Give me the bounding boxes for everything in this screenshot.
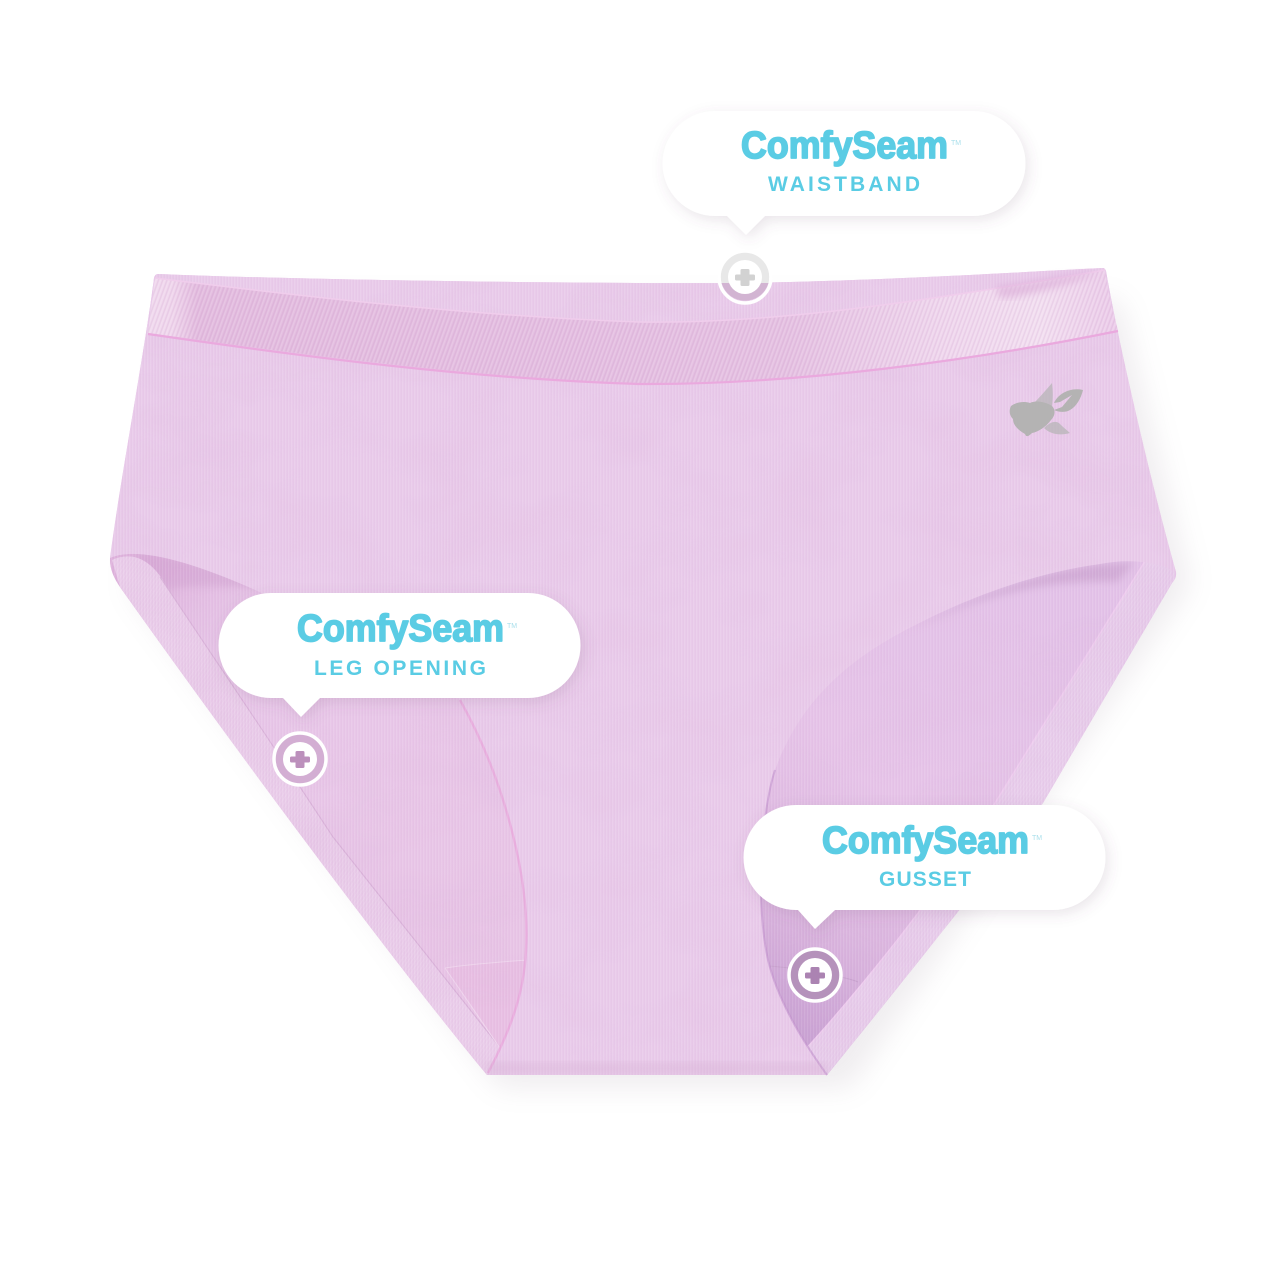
- waistband lower edge: [148, 331, 1118, 384]
- marker: waistband: [719, 251, 771, 303]
- knit texture: [762, 905, 808, 1046]
- front panel left-edge pink seam: [460, 700, 526, 1073]
- garment: briefs: [100, 260, 1185, 1080]
- front panel: [110, 268, 1176, 1075]
- silhouette base: [110, 268, 1176, 1075]
- callout: gusset: [744, 805, 1106, 929]
- trademark: TM: [507, 623, 517, 630]
- right gusset seam: [768, 966, 858, 982]
- callout: leg opening: [218, 593, 580, 717]
- waistband: [148, 270, 1118, 383]
- fish body: [1010, 402, 1055, 436]
- brand name: ComfySeam: [741, 125, 948, 167]
- label: LEG OPENING: [314, 657, 486, 680]
- right stitching: [803, 561, 1145, 1052]
- trademark: TM: [951, 140, 961, 147]
- waistband upper edge: [155, 270, 1105, 322]
- bubble shape: [218, 593, 580, 717]
- lower tail: [1044, 422, 1070, 434]
- back waist shade: [995, 271, 1100, 298]
- tail fan: [1054, 389, 1083, 412]
- label: GUSSET: [879, 868, 971, 891]
- callout: waistband: [662, 111, 1026, 235]
- marker: leg opening: [274, 733, 326, 785]
- garment shadow: [130, 300, 1190, 1088]
- icon: goldfish logo: [1010, 383, 1083, 436]
- left stitching: [160, 577, 502, 1050]
- left fold shadow: [152, 560, 252, 590]
- right inner leg lining: [761, 561, 1176, 1075]
- left inner leg lining: [110, 554, 526, 1075]
- left binding strip: [112, 556, 502, 1075]
- fabric mottling: [100, 260, 1185, 1080]
- brand name: ComfySeam: [822, 820, 1029, 862]
- trademark: TM: [1032, 835, 1042, 842]
- left gusset lining: [445, 960, 527, 1048]
- brand name: ComfySeam: [297, 608, 504, 650]
- dorsal fin: [1035, 383, 1053, 406]
- front panel right-edge shadow: [761, 770, 827, 1075]
- right binding strip: [805, 561, 1176, 1075]
- bottom hem shade: [492, 1064, 823, 1072]
- bubble shape: [744, 805, 1106, 929]
- bubble shape: [662, 111, 1026, 235]
- right fold shadow: [905, 562, 1135, 632]
- waistband twill: [148, 270, 1118, 383]
- marker: gusset: [789, 949, 841, 1001]
- label: WAISTBAND: [768, 173, 920, 196]
